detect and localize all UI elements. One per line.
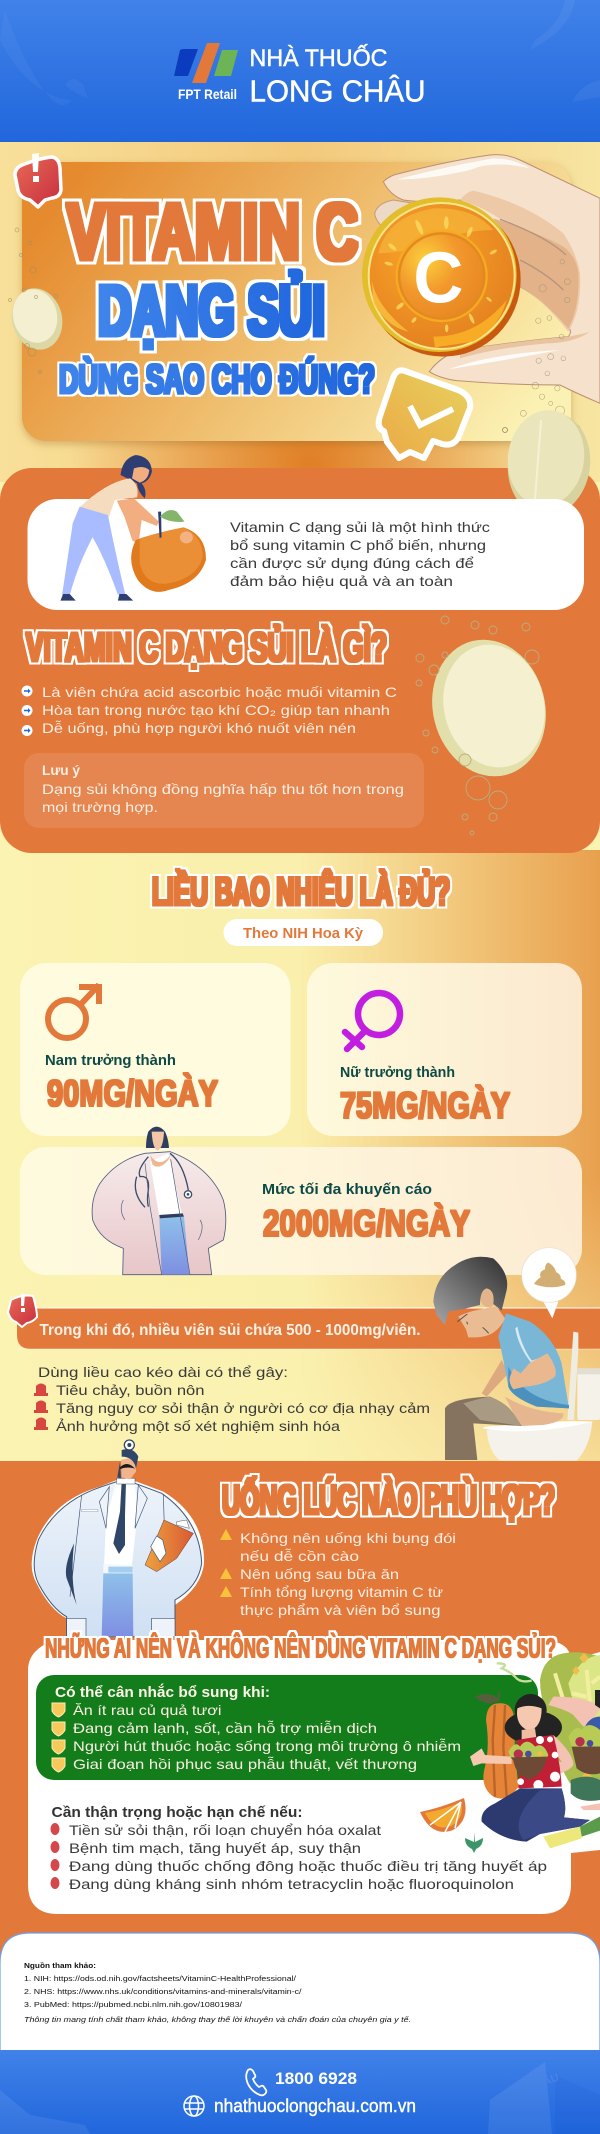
list: high-dose risks: Ảnh hưởng một số xét nghiệm sinh hóa [56, 1418, 340, 1434]
logo wordmark [250, 44, 426, 108]
speech bubble [522, 1248, 576, 1318]
icon: globe [184, 2096, 204, 2116]
panel: may consider supplementing: Người hút thuốc hoặc sống trong môi trường ô nhiễm [73, 1738, 461, 1754]
illustration: woman pushing orange fruit [60, 455, 206, 601]
list: facts: Dễ uống, phù hợp người khó nuốt viên nén [42, 720, 356, 736]
coin: C [413, 238, 463, 319]
note box [24, 753, 424, 828]
intro paragraph: cần được sử dụng đúng cách để [230, 555, 474, 571]
decorative storefront: LONG CHÂU [494, 2071, 561, 2106]
panel: what is vitamin C [0, 468, 600, 853]
card: adult men: Nam trưởng thành [45, 1052, 176, 1069]
list: facts: Hòa tan trong nước tạo khí CO₂ giúp tan nhanh [42, 702, 390, 718]
pill: according to NIH [224, 919, 383, 946]
panel: who should and should not use [28, 1640, 600, 1914]
logo wordmark: LONG CHÂU [250, 74, 426, 108]
icon: orange slice [420, 1798, 466, 1832]
icon: phone [246, 2069, 266, 2095]
list: timing advice: nếu dễ cồn cào [240, 1548, 359, 1564]
list: timing advice: thực phẩm và viên bổ sung [240, 1602, 440, 1618]
shield icons [52, 1703, 65, 1772]
note box: Dạng sủi không đồng nghĩa hấp thu tốt hơn trong [42, 781, 404, 797]
siren icons [32, 1378, 50, 1430]
icon: small green sprout [465, 1832, 483, 1853]
panel: hero title card [22, 162, 571, 441]
panel: may consider supplementing [36, 1675, 538, 1780]
decorative storefront [0, 2062, 600, 2134]
icon: check badge [379, 370, 470, 458]
logo mark [174, 43, 238, 102]
list: use with caution: Đang dùng kháng sinh nhóm tetracyclin hoặc fluoroquinolon [69, 1876, 514, 1892]
panel: references: Nguồn tham khảo: [24, 1961, 96, 1970]
list: use with caution [50, 1804, 547, 1892]
panel: may consider supplementing: Ăn ít rau củ quả tươi [73, 1702, 222, 1718]
illustration: male doctor [32, 1440, 204, 1637]
list: high-dose risks: Tiêu chảy, buồn nôn [56, 1382, 204, 1398]
list: use with caution: Cần thận trọng hoặc hạn chế nếu: [52, 1804, 302, 1821]
card: adult women: Nữ trưởng thành [340, 1064, 455, 1081]
icon: top-right effervescent tablet [501, 405, 597, 532]
list: use with caution: Tiền sử sỏi thận, rối loạn chuyển hóa oxalat [69, 1822, 381, 1838]
illustration: boy on toilet [433, 1248, 600, 1461]
icon: female symbol [345, 993, 400, 1049]
panel: may consider supplementing: Giai đoạn hồi phục sau phẫu thuật, vết thương [73, 1756, 417, 1772]
panel: references: Thông tin mang tính chất tham khảo, không thay thế lời khuyên và chẩn đoán của chuyên gia y tế. [24, 2015, 411, 2024]
hero title text [59, 187, 375, 402]
page background: title zone [0, 142, 600, 482]
card: adult women [307, 963, 582, 1136]
panel: references: 3. PubMed: https://pubmed.ncbi.nlm.nih.gov/10801983/ [24, 2000, 243, 2009]
icon: left effervescent tablet [5, 228, 69, 374]
icon: male symbol [48, 987, 99, 1038]
header band [0, 0, 600, 142]
panel: when to take [0, 1461, 600, 1961]
coin [362, 197, 521, 357]
hero title text: DÙNG SAO CHO ĐÚNG? [59, 356, 375, 402]
list: timing advice: Nên uống sau bữa ăn [240, 1566, 399, 1582]
logo wordmark: NHÀ THUỐC [250, 44, 388, 72]
intro paragraph: Vitamin C dạng sủi là một hình thức [230, 519, 490, 535]
card: recommended maximum: Mức tối đa khuyến cáo [262, 1181, 432, 1198]
intro paragraph: đảm bảo hiệu quả và an toàn [230, 573, 453, 589]
hero title text: DẠNG SỦI [98, 271, 325, 351]
icon: banner alert [8, 1294, 37, 1327]
panel: may consider supplementing: Đang cảm lạnh, sốt, cần hỗ trợ miễn dịch [73, 1720, 377, 1736]
icon: alert badge [15, 153, 61, 207]
list: timing advice [220, 1529, 456, 1618]
panel: references [0, 1933, 600, 2051]
banner: tablets contain: Trong khi đó, nhiều viên sủi chứa 500 - 1000mg/viên. [40, 1322, 420, 1339]
caution icons [50, 1823, 60, 1889]
intro paragraph [230, 519, 490, 589]
card: adult men [20, 963, 290, 1136]
panel: may consider supplementing: Có thể cân nhắc bổ sung khi: [55, 1683, 270, 1701]
list: high-dose risks [32, 1364, 430, 1434]
panel: references: 1. NIH: https://ods.od.nih.gov/factsheets/VitaminC-HealthProfessional/ [24, 1974, 297, 1983]
list: high-dose risks: Tăng nguy cơ sỏi thận ở người có cơ địa nhạy cảm [56, 1400, 430, 1416]
list: timing advice: Không nên uống khi bụng đói [240, 1530, 456, 1546]
banner: tablets contain [17, 1308, 600, 1349]
pill: according to NIH: Theo NIH Hoa Kỳ [243, 926, 363, 942]
page background: dose zone [0, 850, 600, 1470]
icon: large effervescent tablet [416, 616, 560, 835]
intro paragraph: bổ sung vitamin C phổ biến, nhưng [230, 537, 486, 553]
bullet icons [22, 686, 32, 736]
card: adult men: 90MG/NGÀY [47, 1073, 218, 1114]
list: timing advice: Tính tổng lượng vitamin C từ [240, 1584, 443, 1600]
list: use with caution: Bệnh tim mạch, tăng huyết áp, suy thận [69, 1840, 361, 1856]
warning icons [220, 1529, 232, 1597]
note box: mọi trường hợp. [42, 799, 158, 815]
illustration: hand holding vitamin C tablet [362, 155, 600, 432]
card: intro [28, 499, 584, 610]
list: high-dose risks: Dùng liều cao kéo dài có thể gây: [38, 1364, 288, 1380]
footer band: 1800 6928 [275, 2069, 357, 2088]
footer band [0, 2050, 600, 2134]
list: facts [22, 684, 397, 736]
note box: Lưu ý [42, 762, 80, 778]
list: use with caution: Đang dùng thuốc chống đông hoặc thuốc điều trị tăng huyết áp [69, 1858, 547, 1874]
card: recommended maximum [20, 1147, 582, 1275]
list: facts: Là viên chứa acid ascorbic hoặc muối vitamin C [42, 684, 397, 700]
card: adult women: 75MG/NGÀY [340, 1085, 510, 1126]
heading: what is effervescent vitamin C: VITAMIN C DẠNG SỦI LÀ GÌ? [26, 624, 387, 670]
logo mark: FPT Retail [178, 86, 237, 102]
illustration: women with salad and vegetables [470, 1652, 600, 1848]
illustration: woman doctor [92, 1127, 226, 1275]
card: recommended maximum: 2000MG/NGÀY [263, 1203, 470, 1244]
footer band: nhathuoclongchau.com.vn [214, 2096, 416, 2116]
panel: references: 2. NHS: https://www.nhs.uk/conditions/vitamins-and-minerals/vitamin-c/ [24, 1987, 303, 1996]
hero title text: VITAMIN C [67, 187, 358, 276]
